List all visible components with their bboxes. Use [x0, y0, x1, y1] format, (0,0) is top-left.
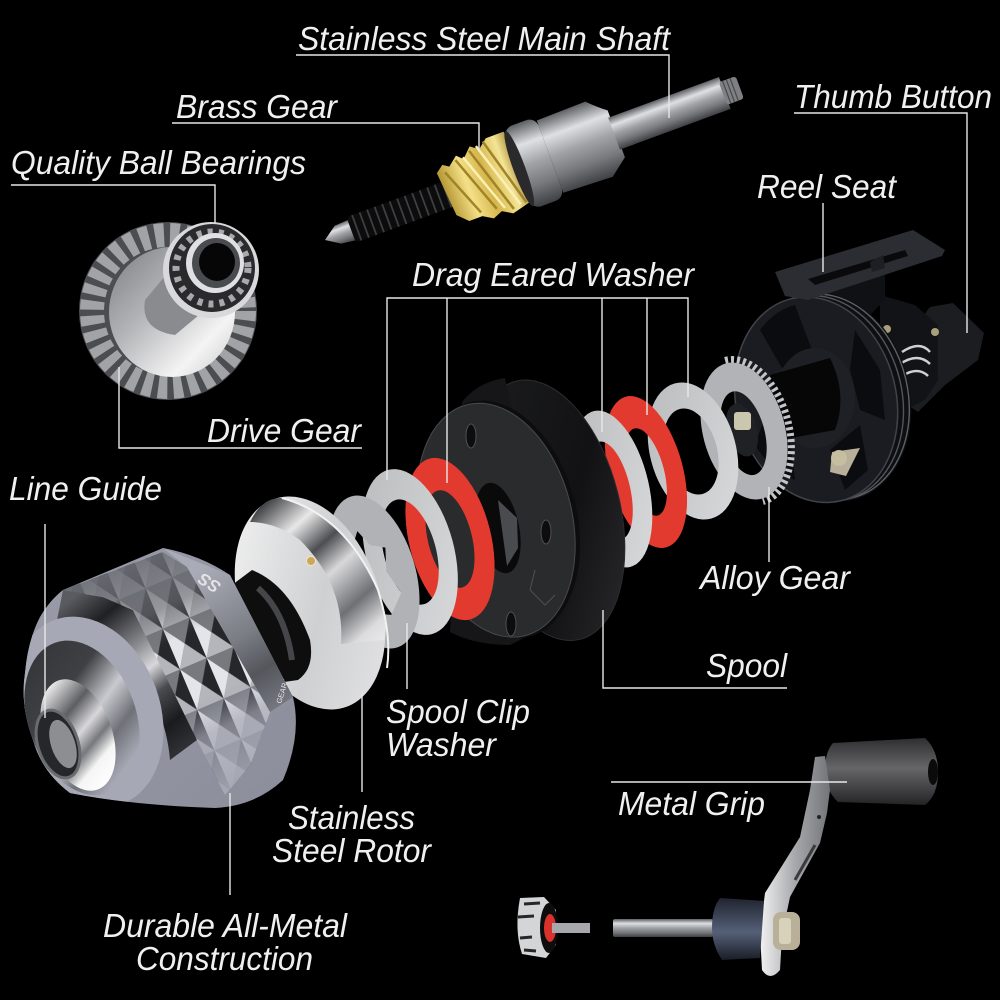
- black screw thread: [346, 179, 461, 243]
- rotor rim: [282, 498, 388, 668]
- shaft: [608, 77, 731, 150]
- brass gear: [431, 130, 536, 233]
- label: stainless steel main shaft: [296, 20, 672, 118]
- handle cap: [517, 897, 558, 958]
- label: drag eared washer: Drag Eared Washer: [412, 256, 696, 293]
- label: metal grip: Metal Grip: [618, 785, 765, 822]
- axle nut: [773, 912, 800, 950]
- label: durable all-metal construction: [103, 793, 349, 977]
- rivet: [306, 556, 316, 566]
- label: thumb button: [794, 78, 992, 333]
- gear ratio strip: [163, 548, 293, 712]
- gear ratio text: GEAR RATIO 5.2:1: [274, 641, 303, 705]
- collar: [536, 95, 630, 195]
- spool dimples and logo: [466, 424, 555, 636]
- gear stem: [144, 270, 205, 335]
- gear teeth: [725, 349, 806, 502]
- diamond facet band: [69, 552, 270, 792]
- label: stainless steel rotor: [272, 693, 433, 869]
- label: stainless steel main shaft: Stainless Steel Main Shaft: [298, 20, 672, 57]
- label: drive gear: [119, 367, 363, 449]
- label: drag eared washer: [387, 256, 696, 483]
- label: alloy gear: Alloy Gear: [698, 559, 852, 596]
- label: spool clip washer: Spool Clip: [386, 693, 530, 730]
- spool rear flange: [446, 364, 650, 657]
- part: drive gear with bearing: [79, 222, 259, 400]
- label: drive gear: Drive Gear: [207, 412, 363, 449]
- threaded end: [719, 76, 744, 105]
- rubber neck: [232, 570, 311, 684]
- part: white drag washer 2: [558, 403, 666, 575]
- rear flange grooves: [713, 274, 933, 522]
- part: main shaft and brass gear: [310, 47, 755, 280]
- shoulder ring: [24, 616, 164, 802]
- gear ring: [686, 353, 802, 509]
- part: stainless steel rotor: [208, 476, 412, 730]
- part: alloy gear: [686, 349, 806, 512]
- label: brass gear: [172, 88, 479, 152]
- part: white drag washer 1: [345, 459, 475, 645]
- label: reel seat: Reel Seat: [757, 168, 898, 205]
- axle: [770, 358, 840, 440]
- nose bore: [34, 708, 82, 780]
- logo mark: SS: [194, 568, 224, 597]
- label: quality ball bearings: Quality Ball Bearings: [11, 144, 306, 181]
- nose cone: [40, 679, 116, 791]
- cap screw: [552, 923, 590, 933]
- label: spool: Spool: [706, 647, 789, 684]
- bearing: [499, 117, 565, 211]
- conical dark band: [57, 590, 197, 760]
- gear bevel face: [109, 247, 235, 377]
- seat plate: [775, 230, 945, 300]
- rotor base plate: [208, 476, 412, 730]
- label: stainless steel rotor: Steel Rotor: [272, 832, 433, 869]
- navy knob: [712, 898, 764, 960]
- label: brass gear: Brass Gear: [176, 88, 339, 125]
- label: durable all-metal construction: Construction: [136, 940, 313, 977]
- rear mechanism: [880, 295, 939, 410]
- part: red drag washer 2: [590, 387, 702, 557]
- label: thumb button: Thumb Button: [794, 78, 992, 115]
- thumb button: [900, 303, 984, 412]
- mounting screw: [830, 448, 860, 476]
- facet fade overlay: [64, 552, 270, 795]
- label: spool: [603, 610, 789, 688]
- spool front face: [393, 383, 604, 656]
- handle rod: [613, 919, 713, 937]
- spool bore: [468, 479, 528, 577]
- part: spool clip washer: [312, 484, 436, 660]
- crank arm: [760, 756, 830, 976]
- gear centre screw: [721, 400, 763, 460]
- bevel teeth disc: [79, 222, 257, 400]
- label: durable all-metal construction: Durable All-Metal: [103, 907, 349, 944]
- body shell: [24, 548, 296, 808]
- bearing rings: [163, 222, 259, 318]
- foam grip: [825, 738, 938, 805]
- part: red drag washer 1: [390, 449, 510, 629]
- label: quality ball bearings: [11, 144, 306, 223]
- shaft tip: [321, 219, 357, 250]
- spool body connector: [450, 378, 560, 645]
- part: reel seat frame: [713, 230, 984, 522]
- part: metal body: [24, 548, 296, 808]
- chrome band: [250, 498, 386, 644]
- part: white drag washer 3: [633, 372, 753, 530]
- shoulder slope: [24, 640, 140, 796]
- part: spool: [393, 364, 650, 657]
- label: line guide: Line Guide: [9, 470, 162, 507]
- label: spool clip washer: [386, 623, 530, 763]
- label: stainless steel rotor: Stainless: [288, 799, 415, 836]
- seat foot: [800, 272, 885, 325]
- label: spool clip washer: Washer: [386, 726, 498, 763]
- plate windows: [755, 305, 885, 490]
- part: handle: [517, 738, 938, 976]
- hub: [775, 348, 855, 448]
